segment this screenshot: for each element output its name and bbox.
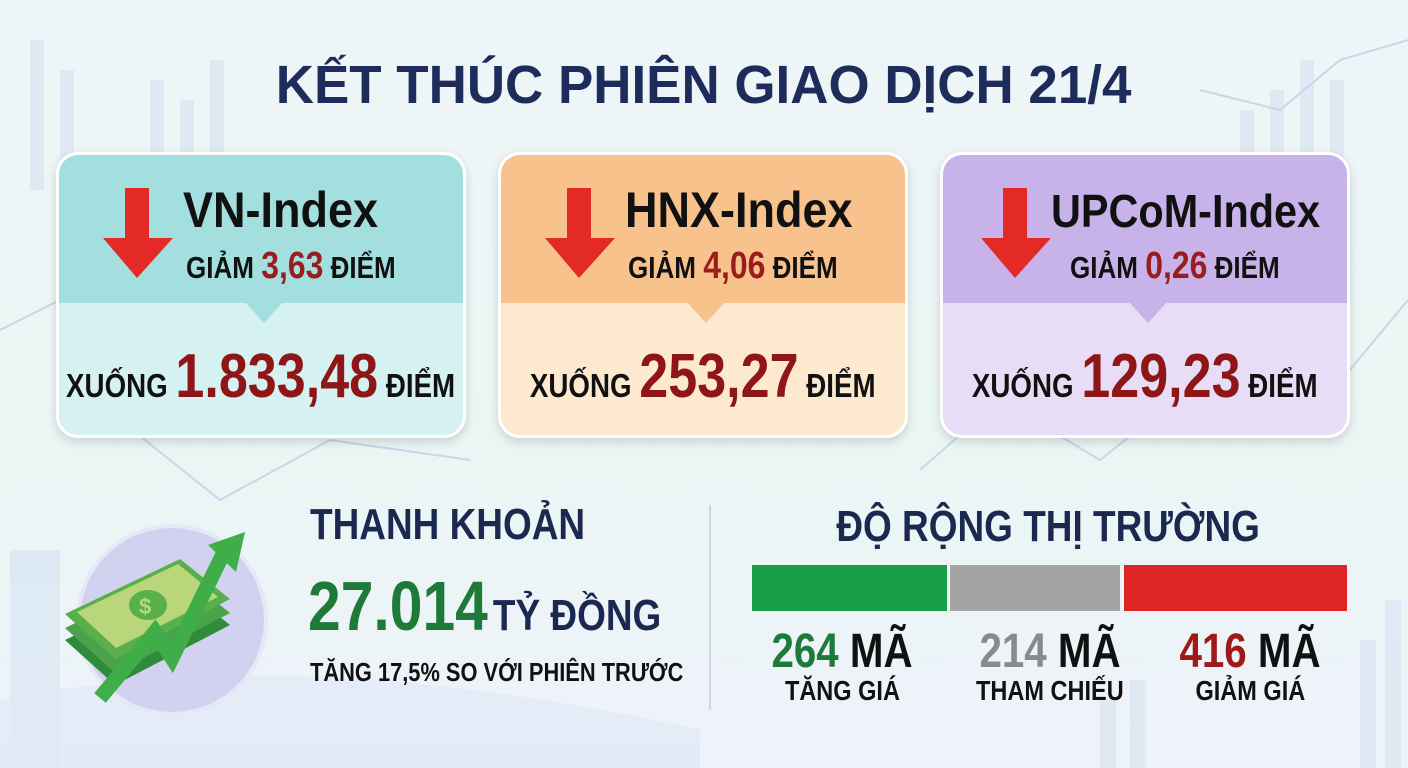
- index name: VN-Index: [183, 182, 378, 238]
- stat: up: 264 MÃ: [771, 625, 913, 678]
- closing value: XUỐNG 1.833,48 ĐIỂM: [66, 342, 456, 411]
- panel: VN-Index: [56, 152, 466, 438]
- stat: down: [1179, 624, 1321, 706]
- icon: down arrow: [981, 188, 1051, 278]
- change: GIẢM 4,06 ĐIỂM: [628, 245, 838, 287]
- icon: money with up arrow: $: [139, 594, 151, 619]
- panel: UPCoM-Index: [940, 152, 1350, 438]
- index name: HNX-Index: [625, 182, 853, 238]
- icon: money with up arrow: [65, 524, 268, 712]
- breadth bar: [752, 565, 1347, 611]
- panel: HNX-Index: [498, 152, 908, 438]
- liquidity change: TĂNG 17,5% SO VỚI PHIÊN TRƯỚC: [310, 657, 683, 687]
- stat: down: 416 MÃ: [1179, 625, 1321, 678]
- liquidity heading: THANH KHOẢN: [310, 500, 585, 549]
- change: GIẢM 0,26 ĐIỂM: [1070, 245, 1280, 287]
- liquidity value: 27.014TỶ ĐỒNG: [308, 567, 661, 645]
- icon: down arrow: [103, 188, 173, 278]
- closing value: XUỐNG 129,23 ĐIỂM: [972, 342, 1318, 411]
- stat: down: GIẢM GIÁ: [1195, 675, 1305, 706]
- index name: UPCoM-Index: [1051, 185, 1320, 237]
- change: GIẢM 3,63 ĐIỂM: [186, 245, 396, 287]
- closing value: XUỐNG 253,27 ĐIỂM: [530, 342, 876, 411]
- stat: unchanged: [976, 624, 1124, 706]
- stat: up: TĂNG GIÁ: [784, 675, 899, 706]
- stat: unchanged: THAM CHIẾU: [976, 675, 1124, 706]
- stat: up: [771, 624, 913, 706]
- breadth heading: ĐỘ RỘNG THỊ TRƯỜNG: [836, 502, 1260, 551]
- icon: down arrow: [545, 188, 615, 278]
- stat: unchanged: 214 MÃ: [979, 625, 1121, 678]
- title: KẾT THÚC PHIÊN GIAO DỊCH 21/4: [276, 55, 1132, 115]
